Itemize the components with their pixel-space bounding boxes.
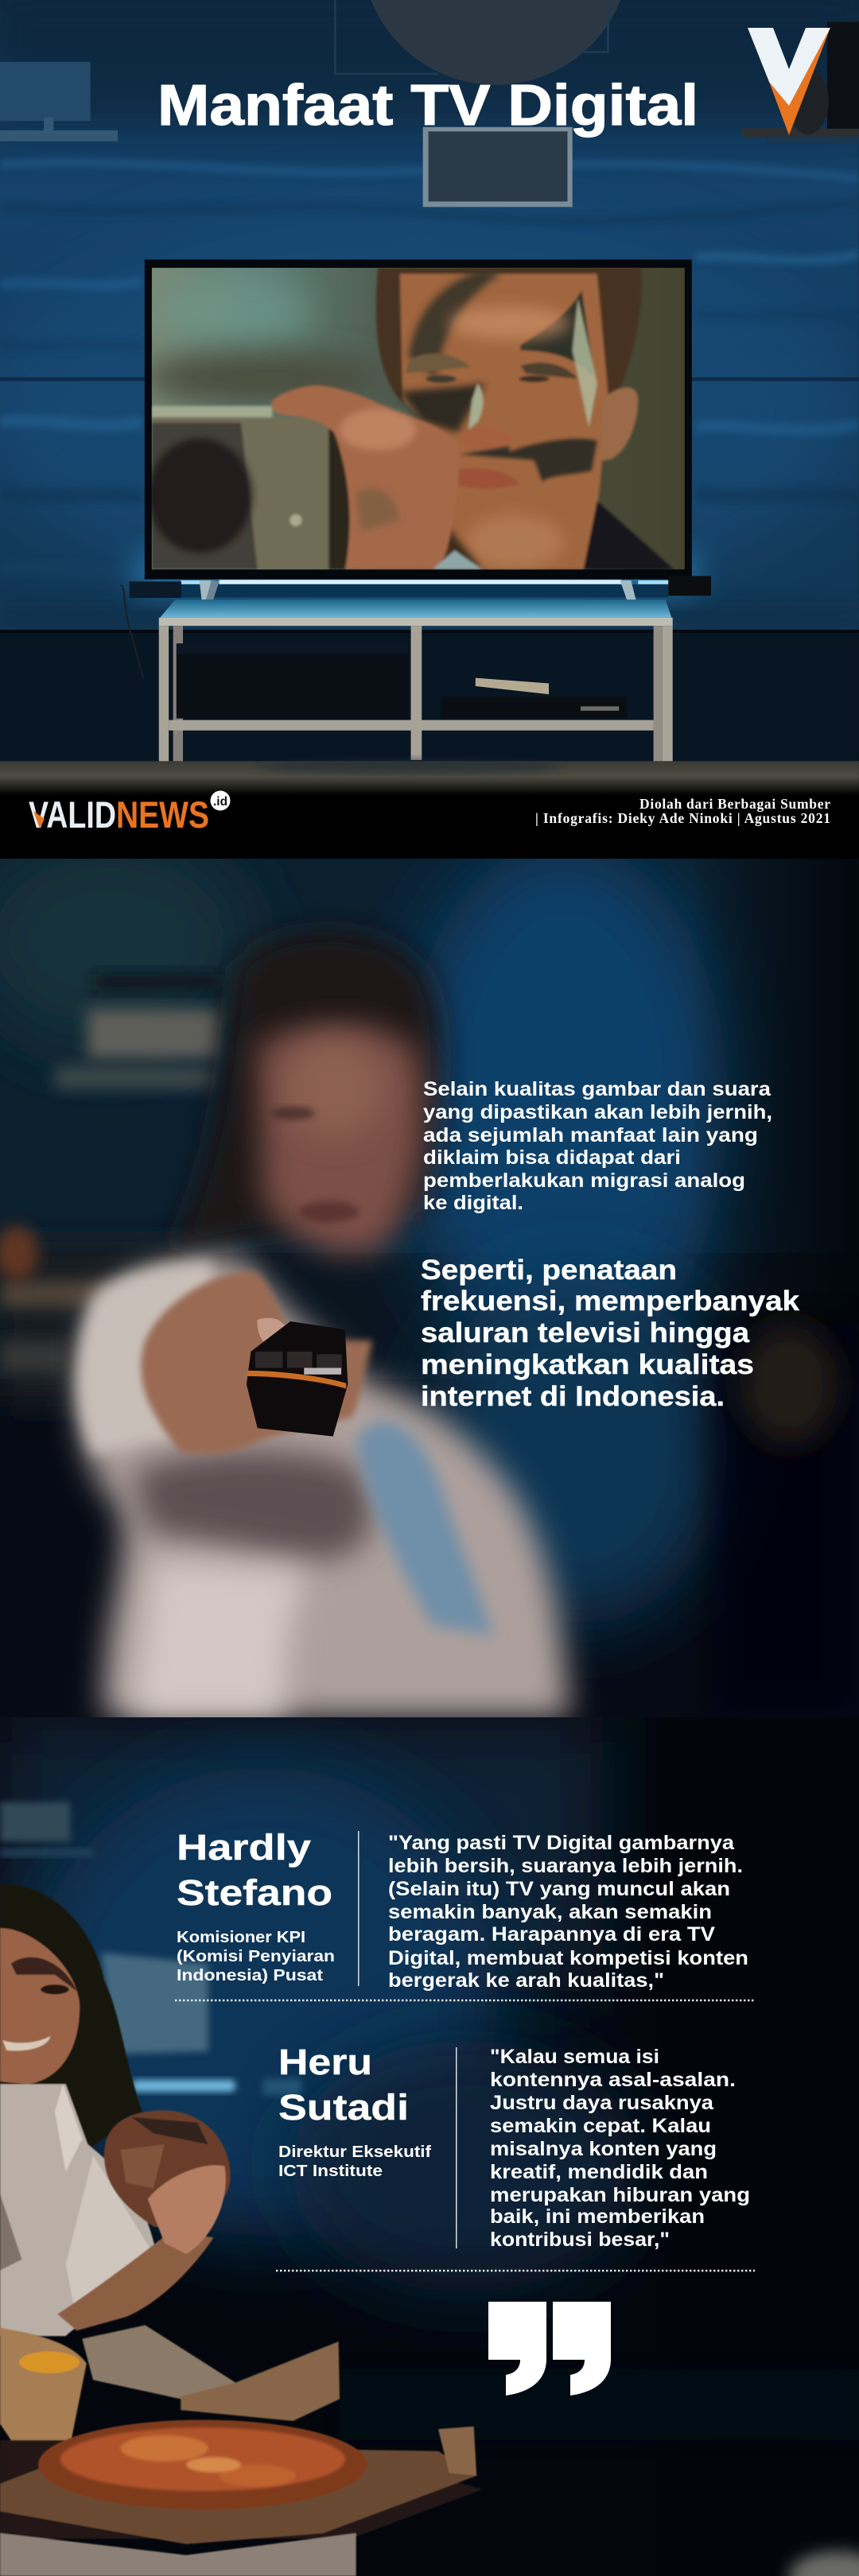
speaker role [177,1928,335,1984]
quote text: merupakan hiburan yang [490,2184,750,2206]
wall decor: lamp, frames and shelves [0,0,859,207]
TV set [121,259,711,679]
highlighted statement: saluran televisi hingga [421,1317,750,1348]
wooden blue wall [0,0,859,630]
TV screen: movie still [142,268,685,569]
blurred woman [76,931,569,1717]
icon: Validnews V logo [748,28,830,135]
quote text: Justru daya rusaknya [490,2092,714,2114]
quote: Hardly Stefano [177,1827,748,1992]
woman eating burger [0,1884,231,2336]
speaker role: Indonesia) Pusat [177,1966,323,1984]
quote text: "Yang pasti TV Digital gambarnya [388,1832,735,1854]
dark blue room background [0,1717,859,2576]
intro paragraph: pemberlakukan migrasi analog [423,1170,745,1192]
speaker name: Hardly [177,1827,311,1868]
hand holding remote control [141,1271,372,1454]
TV console table [159,599,673,774]
highlighted statement: meningkatkan kualitas [421,1349,754,1380]
footer credits: Diolah dari Berbagai Sumber [639,796,830,812]
quote text: kreatif, mendidik dan [490,2161,708,2183]
quote text: baik, ini memberikan [490,2206,705,2228]
intro paragraph: diklaim bisa didapat dari [423,1146,681,1169]
speaker name: Heru [278,2042,372,2082]
quote text: Digital, membuat kompetisi konten [388,1947,748,1969]
LED strip and TV stand legs [121,576,711,679]
blurred background room [0,832,859,1717]
footer logo: VALIDNEWS.id: NEWS [116,793,209,836]
icon: closing quotation marks [488,2302,611,2396]
quote text: kontennya asal-asalan. [490,2069,736,2091]
panel: TV hero scene [0,0,859,859]
quote text: misalnya konten yang [490,2138,717,2160]
footer logo: VALIDNEWS.id: .id [213,795,227,809]
highlighted statement [421,1255,800,1412]
quote text: semakin cepat. Kalau [490,2115,711,2137]
speaker name [177,1827,332,1913]
footer logo: VALIDNEWS.id: VALID [29,793,116,836]
quote text: semakin banyak, akan semakin [388,1901,712,1923]
quote text: "Kalau semua isi [490,2046,659,2068]
intro paragraph: yang dipastikan akan lebih jernih, [423,1101,772,1123]
quote text: bergerak ke arah kualitas," [388,1969,664,1992]
quote text: beragam. Harapannya di era TV [388,1923,715,1946]
speaker role: (Komisi Penyiaran [177,1947,335,1965]
title: Manfaat TV Digital [157,74,698,138]
highlighted statement: Seperti, penataan [421,1255,677,1286]
food boxes and pizza [0,2325,482,2576]
quote text [490,2046,750,2251]
highlighted statement: internet di Indonesia. [421,1381,725,1412]
foreground sofa edge fade [0,759,859,795]
speaker role: Komisioner KPI [177,1928,305,1946]
speaker name [278,2042,409,2128]
highlighted statement: frekuensi, memperbanyak [421,1286,800,1317]
intro paragraph [423,1078,772,1214]
speaker name: Stefano [177,1872,332,1913]
quote text: lebih bersih, suaranya lebih jernih. [388,1855,743,1877]
speaker role: ICT Institute [278,2162,383,2180]
dark lower wall [0,630,859,762]
intro paragraph: ada sejumlah manfaat lain yang [423,1124,758,1146]
intro paragraph: ke digital. [423,1192,523,1214]
speaker role: Direktur Eksekutif [278,2143,431,2161]
footer credits [535,796,830,826]
intro paragraph: Selain kualitas gambar dan suara [423,1078,772,1100]
quote text [388,1832,748,1992]
speaker name: Sutadi [278,2087,409,2128]
footer logo: VALIDNEWS.id [29,790,231,836]
quote: Heru Sutadi [278,2042,750,2251]
speaker role [278,2143,431,2180]
panel: expert quotes [0,1717,859,2576]
quote text: (Selain itu) TV yang muncul akan [388,1878,730,1900]
quote text: kontribusi besar," [490,2229,670,2251]
footer credits: | Infografis: Dieky Ade Ninoki | Agustus 2021 [535,810,830,826]
panel: woman with remote [0,832,859,1717]
